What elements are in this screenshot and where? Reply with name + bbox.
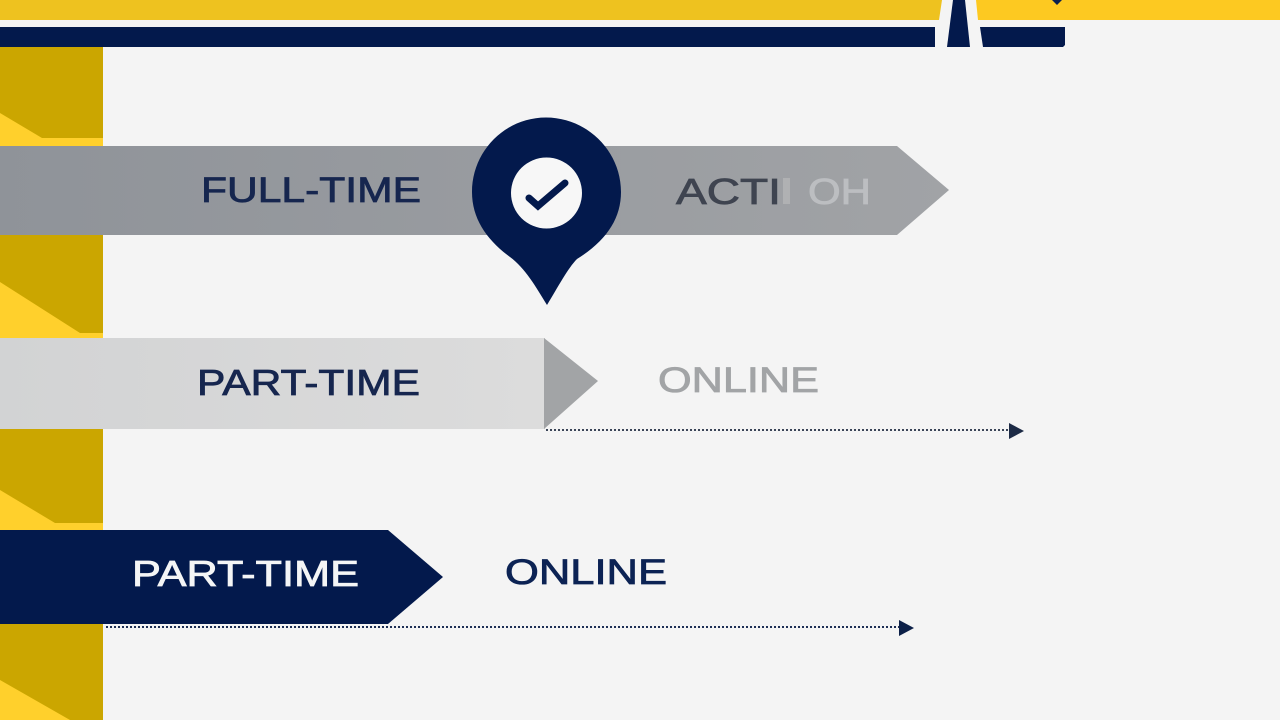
icon: location pin with check	[472, 118, 621, 305]
arrow: full-time action	[0, 146, 949, 235]
label: part-time: PART-TIME	[197, 362, 420, 403]
top banner	[0, 0, 1280, 47]
label: online navy: ONLINE	[505, 553, 667, 592]
dotted arrow: online grey	[546, 423, 1024, 439]
label: action: ACTI	[676, 171, 781, 212]
left gold column	[0, 47, 103, 720]
dotted arrow: online navy	[106, 620, 914, 636]
label: action	[676, 171, 871, 212]
label: part-time white: PART-TIME	[132, 553, 359, 594]
label: action: OH	[808, 171, 871, 212]
arrow: part-time light	[0, 338, 598, 429]
label: online grey: ONLINE	[658, 361, 819, 400]
label: full-time: FULL-TIME	[201, 171, 421, 210]
arrow: part-time navy	[0, 530, 443, 624]
